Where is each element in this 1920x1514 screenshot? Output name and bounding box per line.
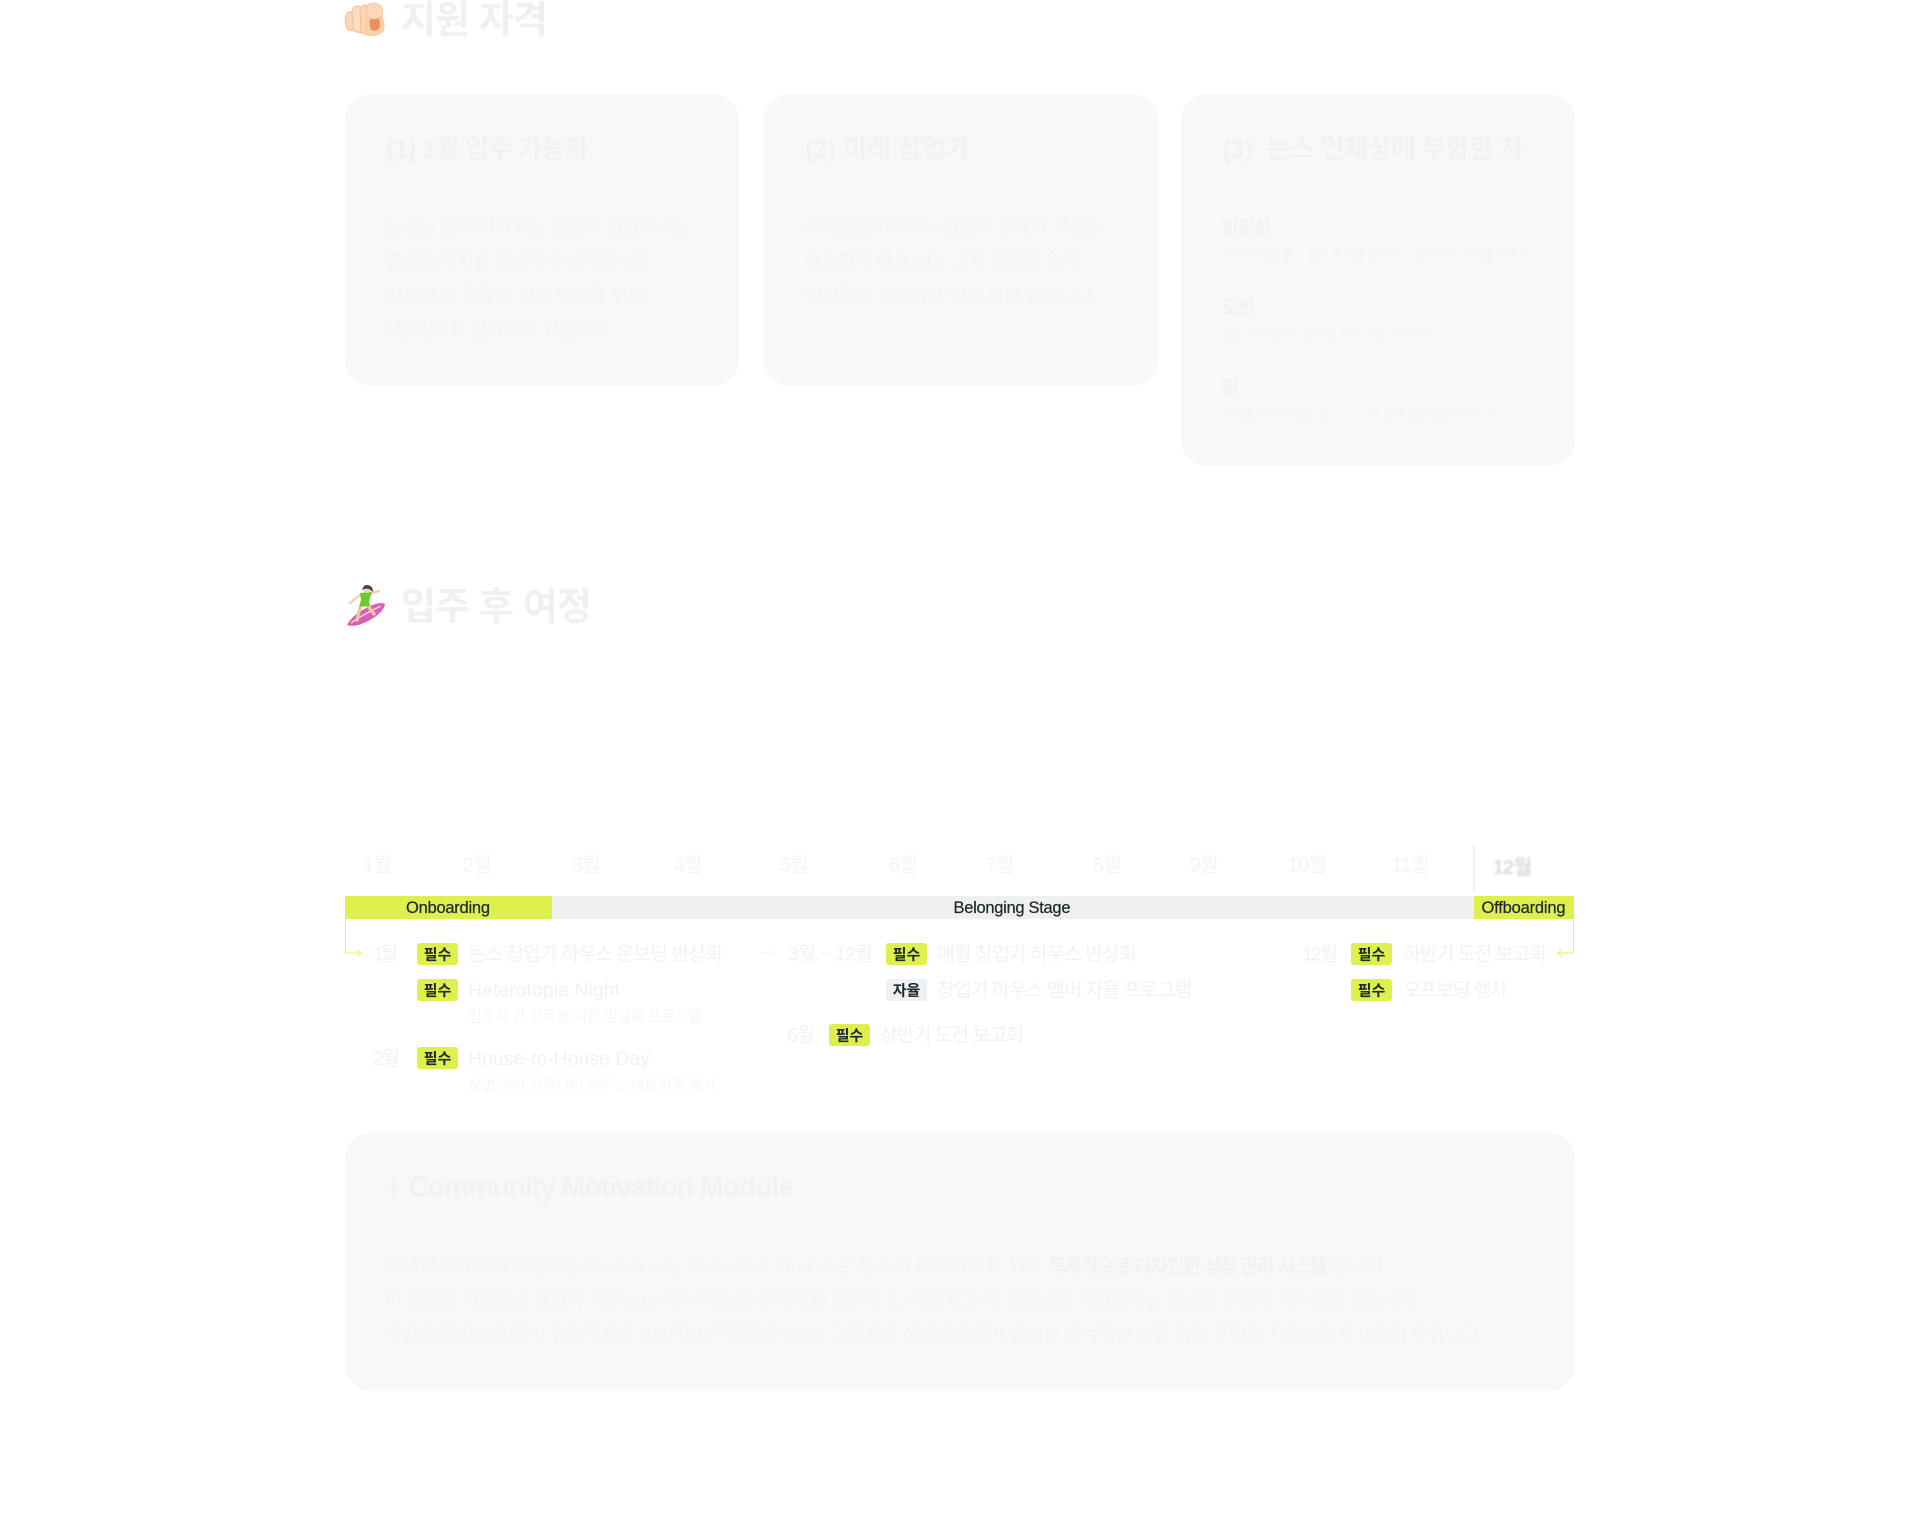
item: House-to-House Day: 창업 기반 커뮤니티 하우스 네트워킹 행사 — [468, 1078, 716, 1094]
arrow: onboarding connector — [346, 919, 361, 956]
item: House-to-House Day: 2월 — [373, 1048, 400, 1070]
stage: belonging — [552, 896, 1474, 919]
month labels: 1월 — [363, 854, 391, 876]
item: House-to-House Day: House-to-House Day — [468, 1048, 650, 1070]
item: onboarding review: 1월 — [373, 944, 398, 966]
month labels: 8월 — [1093, 854, 1121, 876]
month labels: 10월 — [1288, 854, 1326, 876]
card body text: 입주자 간 공동체 의식 형성을 위해 — [385, 285, 645, 307]
panel: Nonce talent profile — [1181, 94, 1575, 466]
stage bar — [345, 896, 1574, 919]
heading text: 지원 자격 — [401, 0, 548, 42]
item: second-half report — [1302, 943, 1547, 966]
schedule: belonging column — [787, 943, 1192, 1046]
month labels: 6월 — [889, 854, 917, 876]
trait: challenge — [1221, 297, 1447, 342]
month labels: 5월 — [780, 854, 808, 876]
item: monthly review: 매월 창업가 하우스 반상회 — [937, 944, 1137, 966]
stage: onboarding — [345, 896, 552, 919]
section heading: journey after move-in — [347, 585, 592, 628]
month labels — [363, 854, 1531, 879]
icon: surfer — [347, 585, 385, 626]
body line 1 — [385, 1256, 1390, 1278]
item: Heterotopia Night: 입주자 간 친목을 위한 밍글링 프로그램 — [468, 1008, 702, 1026]
item: first-half report: 필수 — [836, 1028, 863, 1044]
body line 1: 독자적으로 디자인한 성장 관리 시스템 — [1048, 1256, 1328, 1278]
card background — [1181, 94, 1575, 466]
panel: January move-in — [345, 94, 739, 386]
stage: belonging: Belonging Stage — [954, 899, 1070, 917]
item: Heterotopia Night — [417, 979, 702, 1026]
card body text: 미친듯이 도전하고 있는 자를 찾습니다. — [804, 285, 1098, 307]
month labels: 12월 — [1493, 856, 1531, 879]
month labels: 4월 — [674, 854, 702, 876]
item: first-half report: 6월 — [787, 1024, 815, 1046]
month labels: 11월 — [1391, 854, 1429, 876]
card background — [345, 94, 739, 386]
card body text: 논스는 함께 시작하는 순간이 만들어내는 — [385, 217, 692, 239]
card body text — [804, 217, 1104, 307]
stage: offboarding — [1474, 896, 1574, 919]
item: member program: 자율 — [893, 982, 920, 1000]
body line 2: 이 모듈을 기반으로 창업가 하우스는 매주 목표 달성 여부를 공유하고, 매월 회고 및 방향성을 재정립하는 반상회 문화가 자리잡고 있습니다. — [385, 1290, 1422, 1312]
card title: (1) 1월 입주 가능자 — [386, 134, 589, 164]
trait: challenge: 꿈을 이루겠다는 용기를 갖고 거듭 도전하는 자 — [1221, 328, 1447, 342]
item: second-half report: 필수 — [1358, 946, 1385, 964]
card body text: 중요하지 않습니다. 그저 창업을 위해 — [804, 251, 1080, 273]
card title: + Community Motivation Module — [386, 1172, 794, 1204]
item: first-half report: 상반기 도전 보고회 — [880, 1024, 1024, 1046]
body line 1: 헤테로토피아에 작동되는 Community Motivation Module은 논스가 커뮤니티를 위해 — [385, 1256, 1048, 1278]
item: member program: 창업가 하우스 멤버 자율 프로그램 — [937, 980, 1192, 1002]
schedule: onboarding column — [373, 943, 723, 1094]
body line 1: 입니다. — [1328, 1256, 1390, 1278]
item: second-half report: 12월 — [1302, 944, 1338, 966]
trait: authenticity: 자신이 정말 풀고 싶은 문제를 집착하고 몰입하는 자세를 갖춘 자 — [1221, 248, 1533, 262]
item: monthly review — [788, 943, 1137, 966]
item: House-to-House Day: 필수 — [424, 1050, 451, 1068]
section heading: eligibility — [345, 0, 548, 42]
arrow: offboarding connector — [1558, 919, 1574, 956]
trait: authenticity — [1221, 217, 1533, 262]
trait: authenticity: 진정성 — [1221, 217, 1271, 239]
panel: Community Motivation Module — [345, 1133, 1575, 1391]
item: monthly review: 필수 — [893, 946, 920, 964]
item: offboarding event — [1351, 979, 1508, 1002]
month labels: 7월 — [986, 854, 1014, 876]
trait: challenge: 도전 — [1221, 297, 1255, 319]
item: offboarding event: 필수 — [1358, 982, 1385, 1000]
card background — [345, 1133, 1575, 1391]
card title: (2) 미래 창업가 — [805, 134, 970, 164]
timeline: journey — [345, 845, 1574, 1094]
item: Heterotopia Night: 필수 — [424, 982, 451, 1000]
card body text: 연결의 가치를 중요하게 생각합니다. — [385, 251, 656, 273]
icon: pointing hand — [345, 3, 385, 36]
item: House-to-House Day — [373, 1047, 716, 1094]
card title: (3) 논스 인재상에 부합한 자 — [1222, 134, 1524, 164]
heading text: 입주 후 여정 — [401, 586, 592, 628]
item: first-half report — [787, 1024, 1024, 1046]
item: onboarding review: 필수 — [424, 946, 451, 964]
card background — [764, 94, 1158, 386]
stage: offboarding: Offboarding — [1482, 899, 1566, 917]
item: onboarding review: 논스 창업가 하우스 온보딩 반상회 — [468, 944, 723, 966]
trait: affection: 타인을 위한 마음을 갖고, 더 나은 공동체를 만들어가는 자 — [1221, 408, 1499, 422]
card body text — [385, 1256, 1484, 1346]
item: offboarding event: 오프보딩 행사 — [1403, 980, 1508, 1002]
month labels: 3월 — [572, 854, 600, 876]
panel: future founder — [764, 94, 1158, 386]
arrow: belonging connector — [759, 950, 775, 956]
trait: affection — [1221, 377, 1499, 422]
card body text: 헤테로토피아에서 창업의 단계와 규모는 — [804, 217, 1104, 239]
item: Heterotopia Night: Heterotopia Night — [468, 980, 621, 1002]
item: monthly review: 3월 ~ 12월 — [788, 944, 873, 966]
month labels: 9월 — [1190, 854, 1218, 876]
schedule: offboarding column — [1302, 943, 1547, 1002]
item: second-half report: 하반기 도전 보고회 — [1403, 944, 1547, 966]
body line 3: 주간과 월간의 리듬이 유기적으로 이어지며 구조화된 1년의 과정으로 헤테로토피아 멤버는 체계적인 성장 관리 루틴을 자연스럽게 체득하게 됩니다. — [385, 1324, 1484, 1346]
card body text: 1월 입주를 권장하고 있습니다. — [385, 319, 614, 341]
stage: onboarding: Onboarding — [406, 899, 490, 917]
month labels: 2월 — [463, 854, 491, 876]
trait: affection: 정 — [1221, 377, 1238, 399]
card body text — [385, 217, 692, 341]
